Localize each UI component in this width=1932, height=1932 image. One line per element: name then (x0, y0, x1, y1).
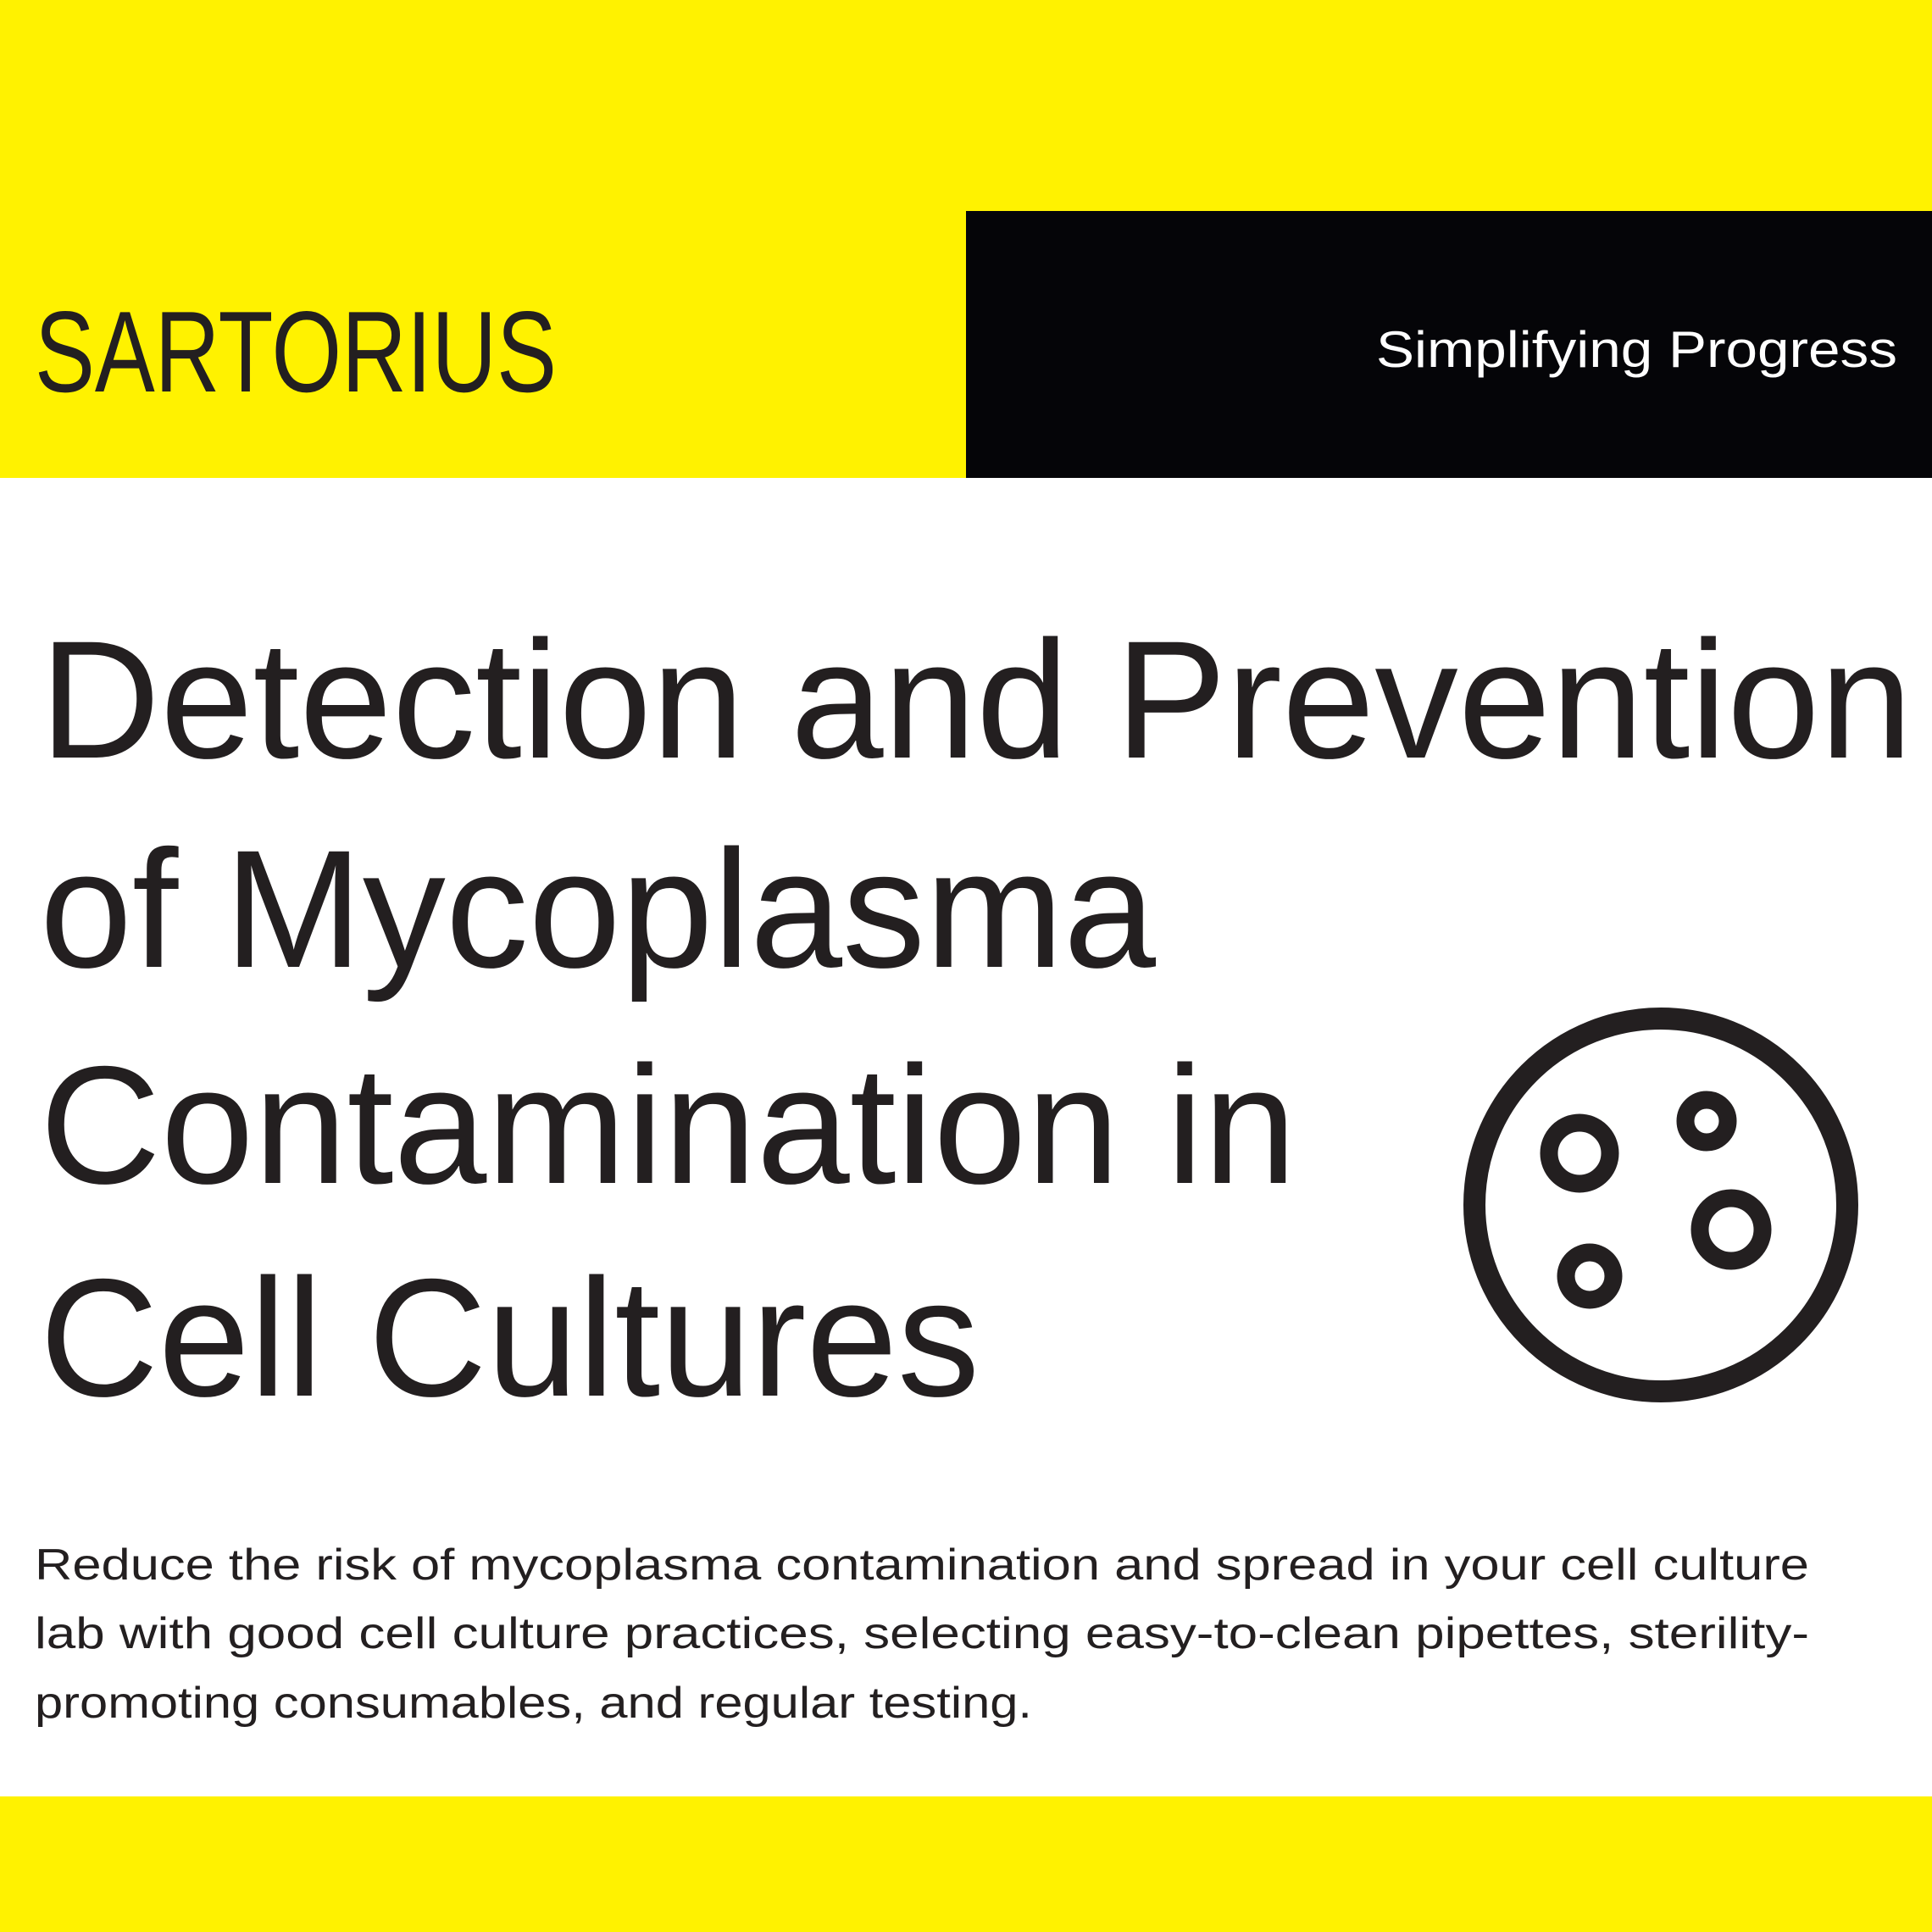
title: of Mycoplasma (40, 815, 1157, 1002)
intro paragraph: Reduce the risk of mycoplasma contamination and spread in your cell culture (35, 1541, 1809, 1590)
title: Cell Cultures (40, 1244, 980, 1431)
intro paragraph: promoting consumables, and regular testing. (35, 1679, 1032, 1728)
intro paragraph (35, 1541, 1809, 1728)
intro paragraph: lab with good cell culture practices, selecting easy-to-clean pipettes, sterility- (35, 1609, 1809, 1658)
icon: petri dish (1474, 1019, 1847, 1391)
footer band (0, 1796, 1932, 1932)
tagline box: Simplifying Progress (1376, 321, 1897, 378)
logo: SARTORIUS: SARTORIUS (35, 287, 557, 416)
title: Detection and Prevention (40, 606, 1913, 793)
title (40, 606, 1913, 1431)
title: Contamination in (40, 1031, 1296, 1219)
header band (0, 0, 1932, 478)
tagline box (966, 211, 1932, 478)
